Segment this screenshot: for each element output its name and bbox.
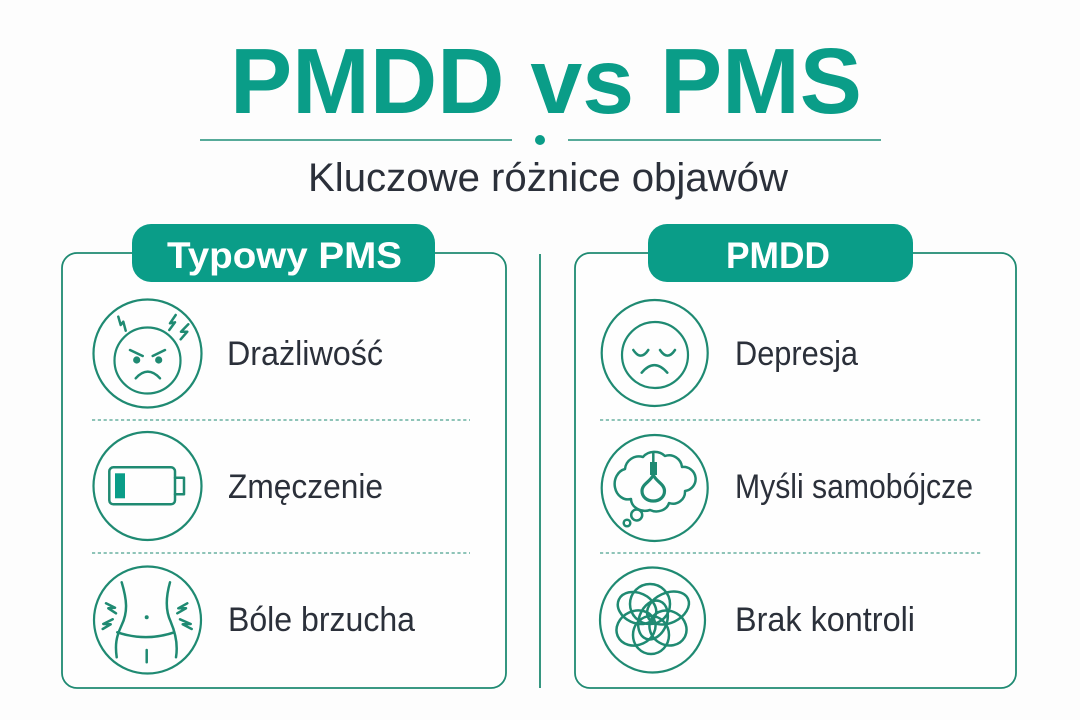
row divider <box>600 552 982 554</box>
row divider <box>600 419 982 421</box>
title divider with dot <box>200 135 881 145</box>
center divider <box>539 254 541 688</box>
badge: Typowy PMS: Typowy PMS <box>167 235 402 276</box>
icon: tangled loops <box>600 568 705 672</box>
panel: Typowy PMS <box>62 224 506 688</box>
title: PMDD vs PMS <box>230 29 862 133</box>
label: Myśli samobójcze: Myśli samobójcze <box>735 468 973 506</box>
icon: low battery <box>94 432 202 540</box>
icon: angry face <box>94 300 202 408</box>
badge: PMDD <box>648 224 913 282</box>
icon: sad face <box>602 300 708 406</box>
label: Depresja: Depresja <box>735 335 858 373</box>
label: Brak kontroli: Brak kontroli <box>735 601 915 639</box>
label: Drażliwość: Drażliwość <box>227 335 383 373</box>
label: Zmęczenie: Zmęczenie <box>228 468 383 506</box>
icon: abdomen with pain <box>94 566 201 674</box>
badge: PMDD: PMDD <box>726 235 830 276</box>
row divider <box>92 552 470 554</box>
subtitle: Kluczowe różnice objawów <box>308 156 788 200</box>
icon: thought bubble with noose <box>602 435 708 541</box>
label: Bóle brzucha: Bóle brzucha <box>228 601 415 639</box>
row divider <box>92 419 470 421</box>
badge: Typowy PMS <box>132 224 435 282</box>
panel: PMDD <box>575 224 1016 688</box>
